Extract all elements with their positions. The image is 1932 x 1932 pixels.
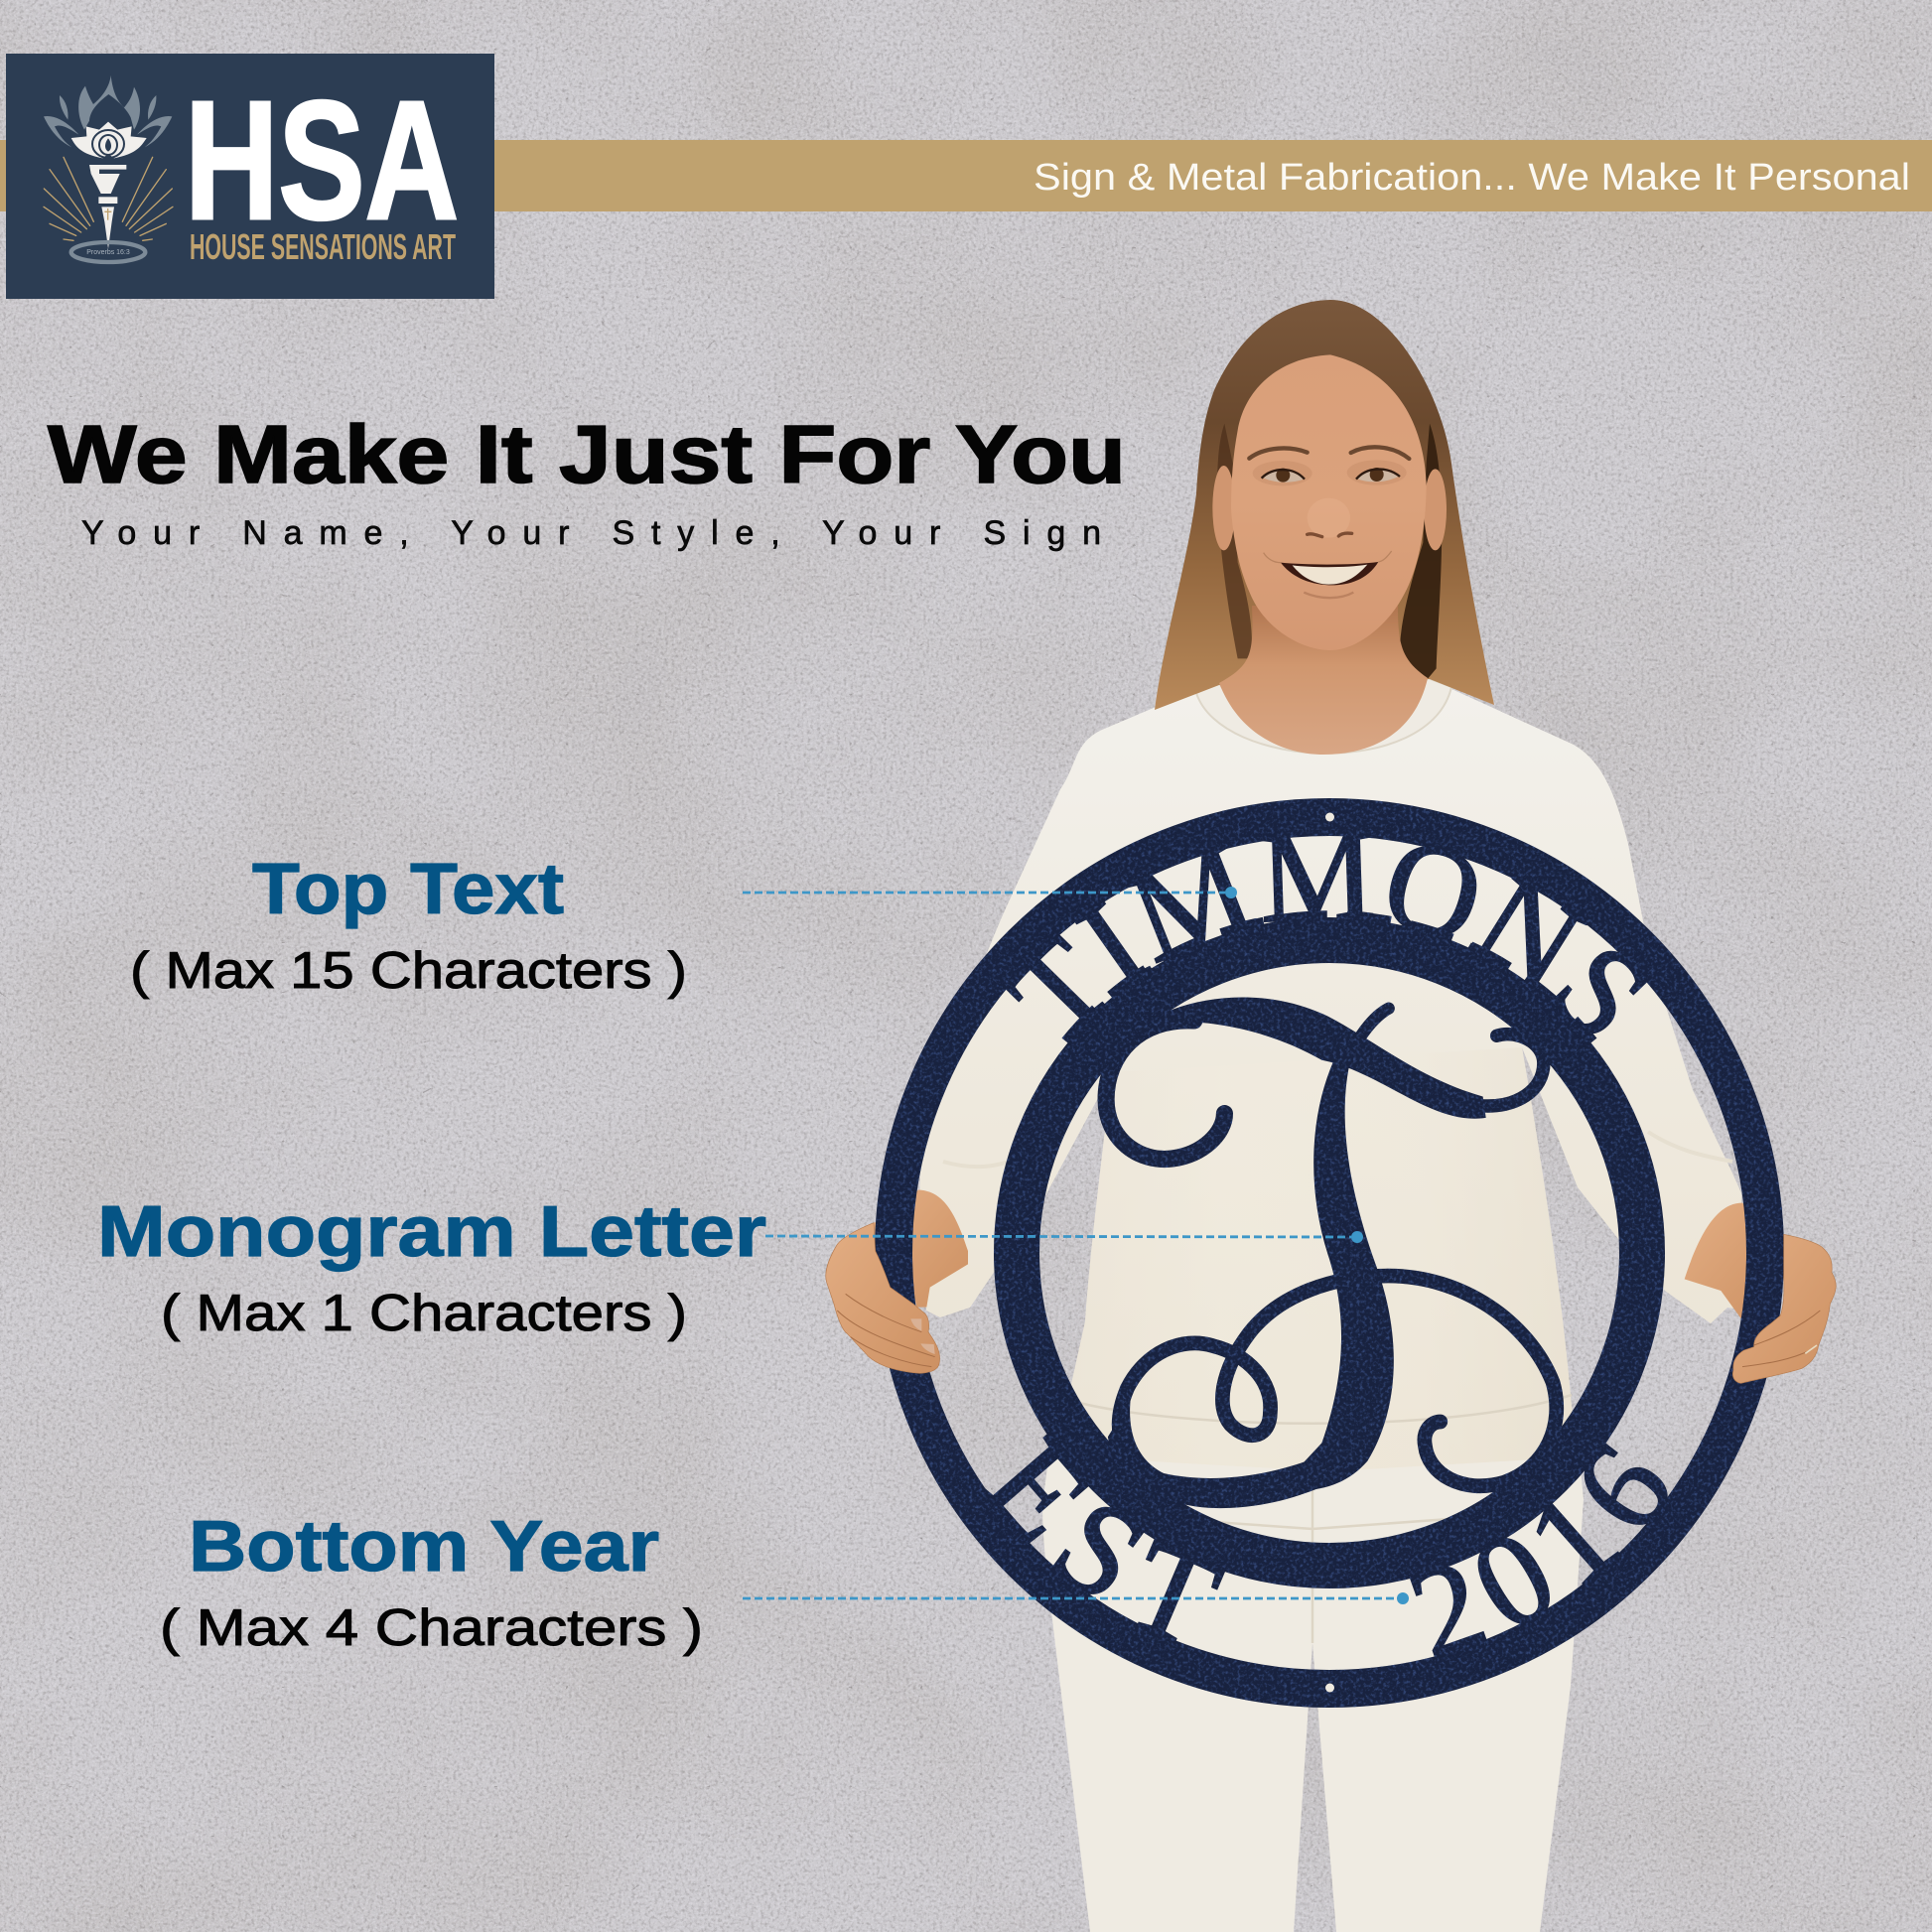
connector tabs for top text — [1067, 917, 1591, 1042]
outer ring — [894, 817, 1765, 1689]
leader line: top text — [743, 887, 1237, 898]
callout heading: Bottom Year — [189, 1507, 659, 1587]
headline: We Make It Just For You — [48, 408, 1126, 500]
eyes — [1262, 468, 1400, 483]
callout limit: ( Max 4 Characters ) — [160, 1599, 703, 1657]
right forearm — [1685, 1203, 1784, 1320]
nose — [1308, 498, 1352, 538]
metal monogram sign — [875, 798, 1784, 1708]
callout: monogram letter — [97, 1192, 766, 1342]
banner tagline: Sign & Metal Fabrication... We Make It Personal — [1034, 157, 1910, 199]
callout: top text — [130, 850, 687, 1000]
bottom text EST: EST — [985, 1434, 1225, 1641]
right hand fingers — [1732, 1234, 1836, 1383]
callout: bottom year — [160, 1507, 703, 1657]
woman holding sign — [874, 300, 1784, 1932]
top text TIMMONS: TIMMONS — [1006, 836, 1647, 1035]
mounting holes — [1325, 812, 1334, 1692]
subheading: Your Name, Your Style, Your Sign — [81, 514, 1101, 552]
face — [1212, 354, 1447, 650]
leader line: monogram letter — [765, 1231, 1363, 1243]
callout heading: Monogram Letter — [97, 1192, 766, 1272]
pants — [1042, 1449, 1584, 1932]
callout limit: ( Max 1 Characters ) — [161, 1285, 687, 1342]
inner ring — [1017, 940, 1642, 1566]
leader line: bottom year — [743, 1592, 1409, 1604]
mouth — [1264, 551, 1392, 598]
callout limit: ( Max 15 Characters ) — [130, 942, 687, 1000]
ears — [1212, 466, 1447, 550]
icon: torch and lotus emblem: Proverbs 16:3 — [86, 249, 130, 256]
hair — [1155, 300, 1494, 710]
brows — [1249, 447, 1409, 459]
logo wordmark HSA: HSA — [185, 67, 459, 255]
logo panel — [6, 54, 494, 299]
hair shadow beside face — [1217, 424, 1442, 678]
gold banner band — [0, 140, 1932, 211]
left forearm and thumb — [874, 1189, 968, 1308]
neck — [1219, 606, 1428, 755]
face shape — [1231, 354, 1427, 650]
left hand fingers — [826, 1223, 940, 1373]
bottom year 2016: 2016 — [1410, 1444, 1668, 1656]
shirt — [918, 678, 1741, 1471]
eye sockets — [1253, 460, 1407, 485]
logo subtitle: HOUSE SENSATIONS ART — [190, 226, 456, 267]
icon: torch and lotus emblem — [44, 75, 173, 262]
icon: script monogram flourish — [1106, 997, 1557, 1508]
callout heading: Top Text — [252, 850, 564, 929]
